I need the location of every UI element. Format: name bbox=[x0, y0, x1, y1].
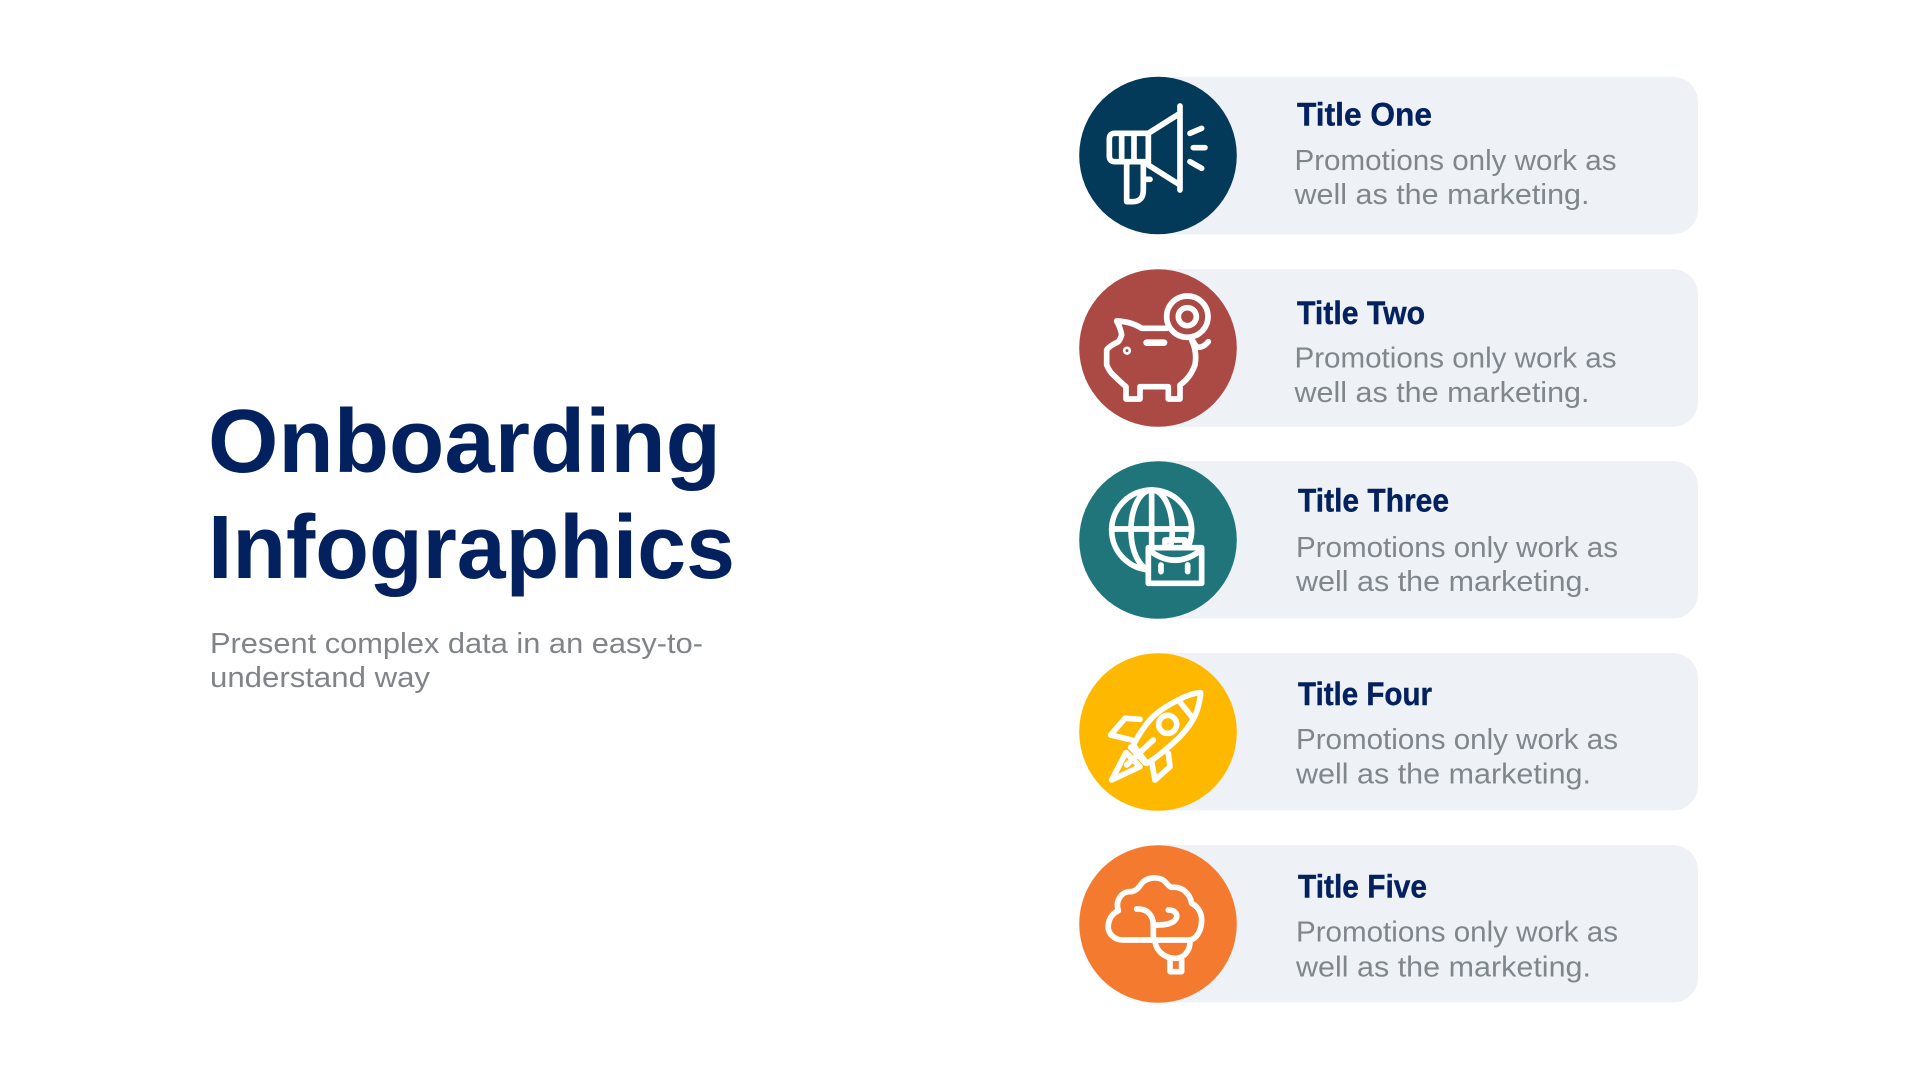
heading: Title Four bbox=[1298, 676, 1432, 712]
description: Promotions only work as bbox=[1296, 917, 1618, 949]
card background bbox=[1158, 461, 1698, 618]
panel: title one bbox=[1079, 77, 1698, 234]
subtitle bbox=[210, 628, 703, 694]
card background bbox=[1158, 77, 1698, 234]
panel: title five bbox=[1079, 845, 1698, 1003]
circle bbox=[1079, 461, 1237, 619]
title: Infographics bbox=[208, 498, 735, 598]
heading: Title Five bbox=[1298, 868, 1427, 904]
description: well as the marketing. bbox=[1293, 179, 1590, 211]
circle bbox=[1079, 653, 1237, 811]
circle bbox=[1079, 77, 1237, 234]
icon: megaphone bbox=[1109, 106, 1205, 202]
panel: title four bbox=[1079, 653, 1698, 811]
icon: brain bbox=[1108, 878, 1202, 972]
description: Promotions only work as bbox=[1294, 342, 1616, 374]
panel: title three bbox=[1079, 461, 1698, 619]
description bbox=[1295, 724, 1618, 790]
card background bbox=[1158, 845, 1698, 1002]
title: Onboarding bbox=[208, 392, 721, 492]
circle bbox=[1079, 269, 1237, 427]
description: well as the marketing. bbox=[1295, 758, 1591, 790]
subtitle: understand way bbox=[210, 662, 431, 694]
description: Promotions only work as bbox=[1294, 145, 1616, 177]
description: Promotions only work as bbox=[1296, 724, 1618, 756]
description bbox=[1295, 917, 1618, 983]
icon: rocket bbox=[1111, 693, 1201, 780]
description bbox=[1293, 145, 1616, 211]
description bbox=[1295, 532, 1618, 598]
card background bbox=[1158, 269, 1698, 427]
heading: Title Three bbox=[1298, 483, 1449, 519]
circle bbox=[1079, 845, 1237, 1003]
heading: Title Two bbox=[1297, 295, 1425, 331]
description: well as the marketing. bbox=[1295, 566, 1591, 598]
card background bbox=[1158, 653, 1698, 810]
description: Promotions only work as bbox=[1296, 532, 1618, 564]
description bbox=[1293, 342, 1616, 409]
panel: title two bbox=[1079, 269, 1698, 427]
icon: piggy bank with coin bbox=[1107, 296, 1208, 399]
icon: globe with briefcase bbox=[1112, 490, 1202, 583]
heading: Title One bbox=[1297, 97, 1432, 133]
description: well as the marketing. bbox=[1293, 377, 1590, 409]
title bbox=[208, 392, 735, 598]
subtitle: Present complex data in an easy-to- bbox=[210, 628, 703, 660]
description: well as the marketing. bbox=[1295, 951, 1591, 983]
